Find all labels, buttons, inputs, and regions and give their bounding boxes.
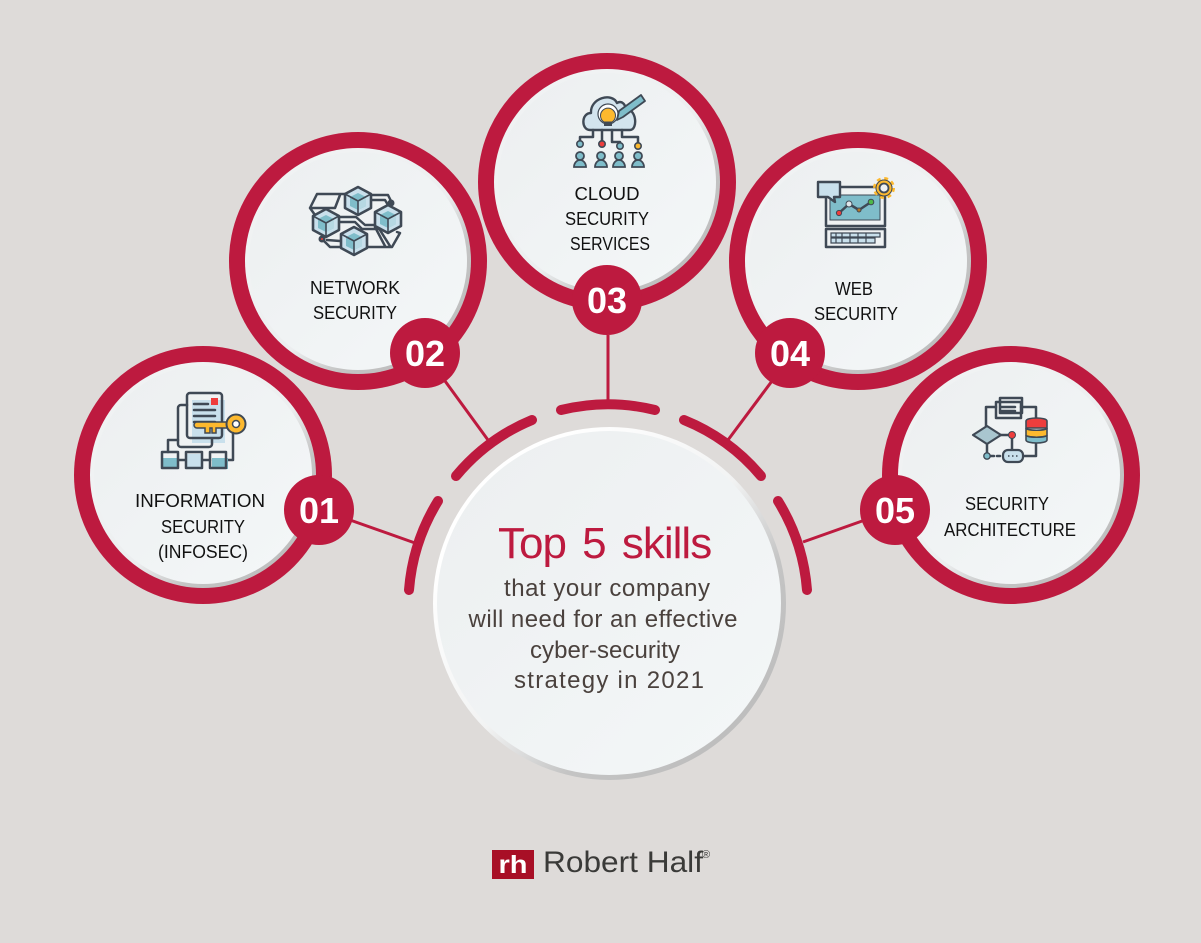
icon: network cubes	[310, 187, 401, 255]
icon: cloud, bulb and people	[574, 95, 645, 167]
label: information security: INFORMATION	[135, 491, 265, 511]
label: web security: SECURITY	[814, 304, 898, 324]
label: security architecture: SECURITY	[965, 494, 1049, 514]
badge 01	[284, 475, 354, 545]
central text: cyber-security	[530, 637, 680, 664]
panel: central circle	[433, 427, 786, 780]
badge 02: 02	[405, 333, 445, 374]
central title: Top 5 skills	[498, 519, 711, 568]
badge 02	[390, 318, 460, 388]
label: web security	[814, 279, 898, 324]
logo: Robert Half: rh	[498, 851, 528, 879]
label: cloud security services: SERVICES	[570, 234, 650, 254]
label: cloud security services: CLOUD	[574, 184, 640, 204]
label: information security	[135, 491, 265, 562]
panel: 04 web security	[729, 132, 987, 390]
label: network security	[310, 278, 400, 323]
arcs around central circle	[409, 404, 807, 590]
logo: Robert Half: ®	[702, 849, 710, 861]
label: cloud security services	[565, 184, 650, 254]
badge 04	[755, 318, 825, 388]
central text	[468, 575, 738, 694]
label: web security: WEB	[835, 279, 873, 299]
label: network security: NETWORK	[310, 278, 400, 298]
panel: 01 information security	[74, 346, 354, 604]
panel: 03 cloud security services	[478, 53, 736, 335]
badge 03: 03	[587, 280, 627, 321]
label: security architecture	[944, 494, 1076, 540]
label: cloud security services: SECURITY	[565, 209, 649, 229]
label: security architecture: ARCHITECTURE	[944, 520, 1076, 540]
central text: will need for an effective	[468, 606, 738, 633]
badge 04: 04	[770, 333, 810, 374]
label: information security: (INFOSEC)	[158, 542, 248, 562]
badge 05: 05	[875, 490, 915, 531]
icon: monitor, chart and gear	[818, 180, 892, 247]
logo: Robert Half	[492, 846, 710, 879]
badge 03	[572, 265, 642, 335]
icon: flow diagram and database	[973, 398, 1047, 462]
logo: Robert Half: Robert Half	[543, 846, 704, 879]
panel: 02 network security	[229, 132, 487, 390]
central text: strategy in 2021	[514, 667, 704, 694]
panel: 05 security architecture	[860, 346, 1140, 604]
badge 01: 01	[299, 490, 339, 531]
icon: document and key	[162, 393, 246, 469]
central text: that your company	[504, 575, 710, 602]
label: information security: SECURITY	[161, 517, 245, 537]
label: network security: SECURITY	[313, 303, 397, 323]
badge 05	[860, 475, 930, 545]
connector lines	[350, 335, 865, 543]
